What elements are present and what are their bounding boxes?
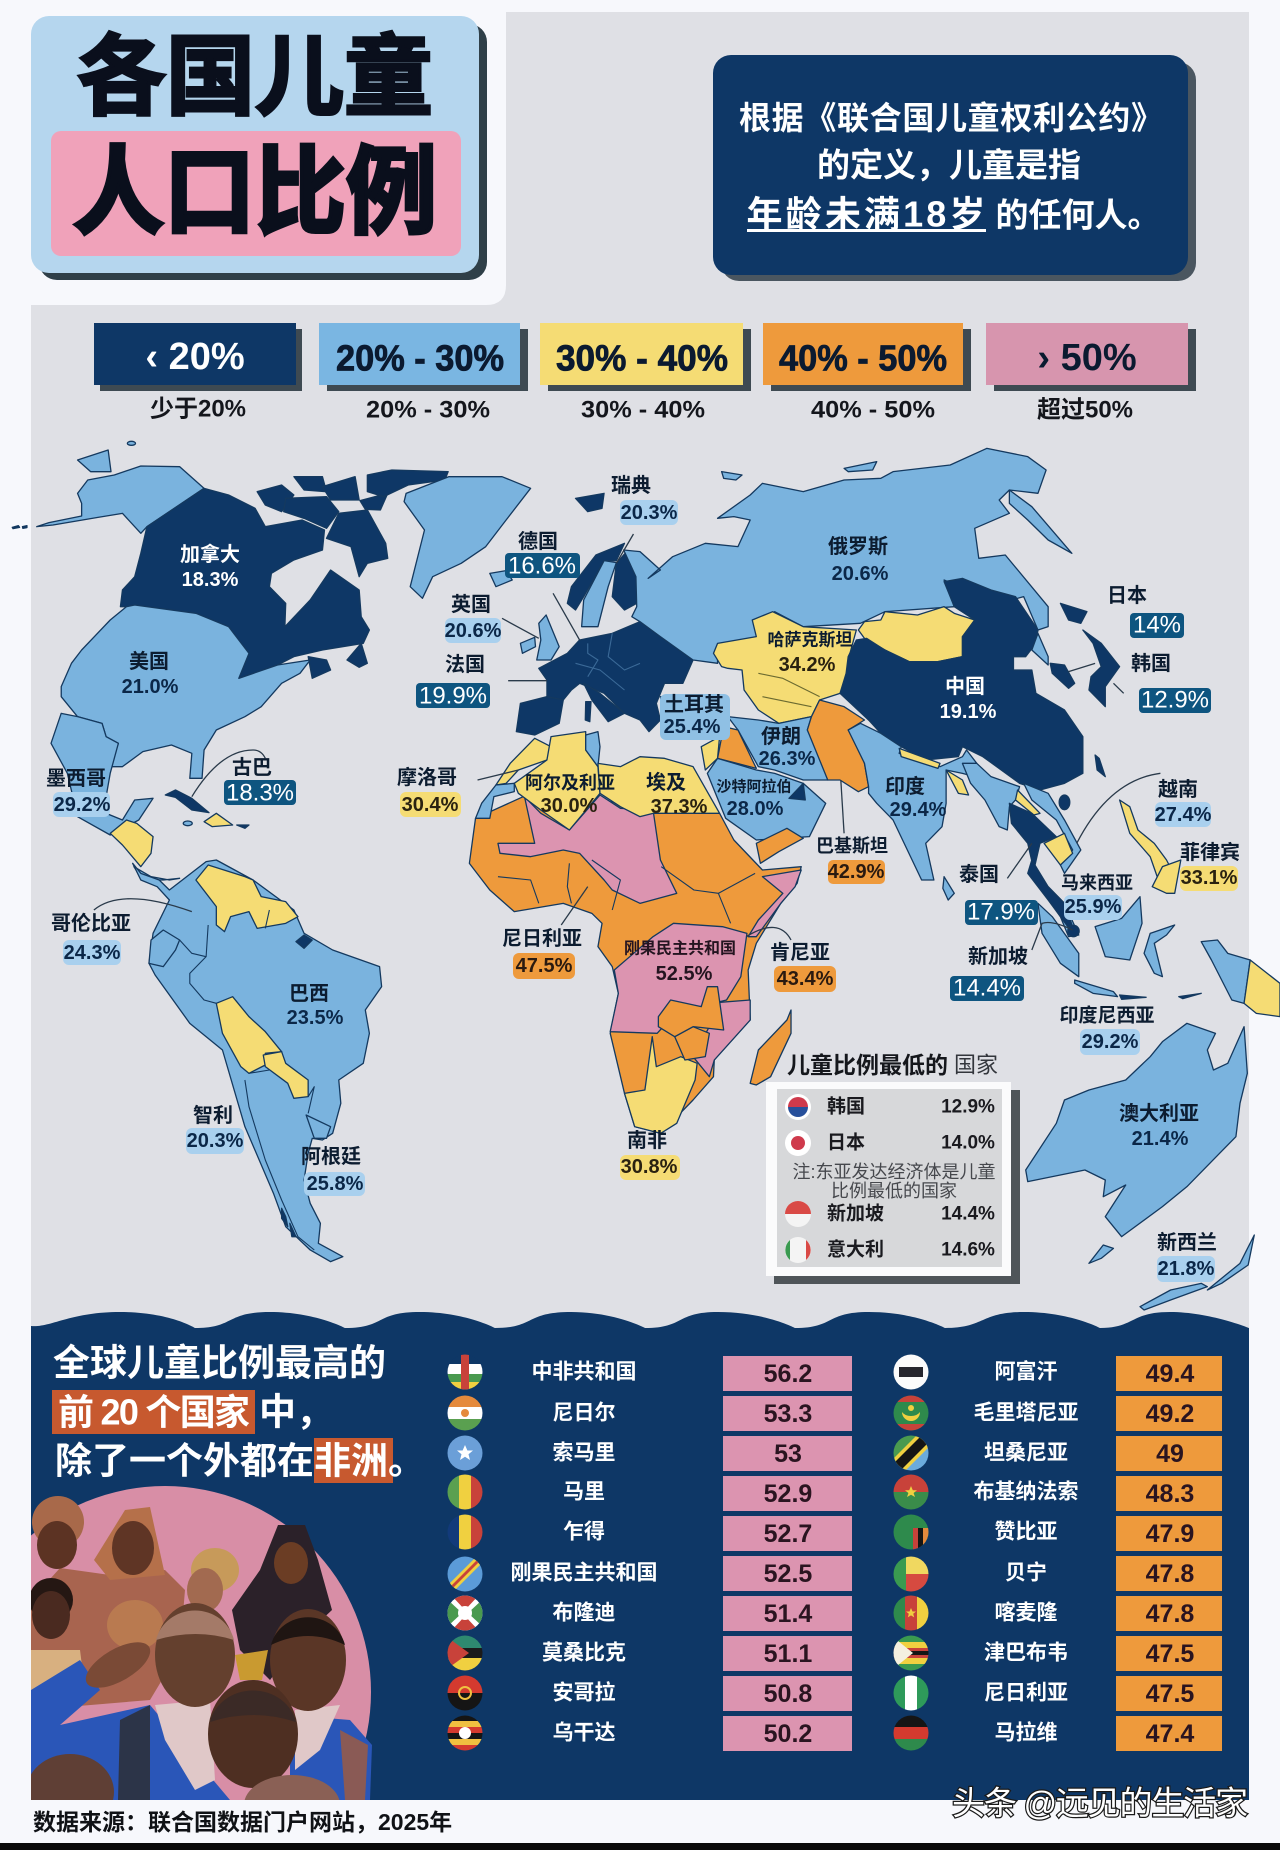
row: Tanzania: 坦桑尼亚 [984,1442,1068,1464]
label: DR Congo [624,938,736,985]
row: Chad: 52.7 [764,1520,812,1548]
label: Australia [1119,1102,1199,1150]
label: Pakistan: 巴基斯坦 [816,835,888,856]
row: Zambia: 47.9 [1146,1520,1194,1548]
label: Argentina [301,1145,365,1196]
map: africa [469,732,801,1133]
row: Cameroon: 47.8 [1146,1600,1194,1628]
blue uniforms [31,1633,372,1800]
source note: 数据来源：联合国数据门户网站，2025年 [33,1809,452,1835]
row: Mali: 马里 [563,1480,605,1504]
row: Angola: 安哥拉 [552,1680,616,1704]
row: Zambia [893,1514,1222,1551]
row: Somalia: 53 [774,1440,802,1468]
row: Uganda: 50.2 [764,1720,812,1748]
title card [31,16,487,280]
background girls [29,1496,239,1710]
row: Japan: 14.0% [941,1132,995,1154]
row: Nigeria: 47.5 [1146,1680,1194,1708]
label: Germany: 16.6% [508,552,576,580]
label: Nigeria: 尼日利亚 [502,927,582,950]
label: Kazakhstan: 34.2% [779,654,836,676]
label: UK: 20.6% [445,620,502,642]
map panel background [31,12,1249,1340]
label: Mexico: 29.2% [54,794,111,816]
row: Somalia: 索马里 [552,1442,616,1464]
title notch [0,0,506,305]
label: Egypt: 37.3% [651,796,708,818]
label: Germany: 德国 [518,530,558,553]
highlight: Africa [314,1438,393,1483]
row: South Korea: 韩国 [827,1094,865,1118]
row: Benin [893,1556,1222,1592]
definition box: 的定义，儿童是指 [817,146,1081,184]
label: Malaysia [1061,873,1133,920]
label: Malaysia: 25.9% [1065,896,1122,918]
row: Angola: 50.8 [764,1680,812,1708]
row: Zimbabwe: 津巴布韦 [984,1642,1068,1664]
row: DR Congo: 刚果民主共和国 [510,1562,658,1584]
label: Nigeria: 47.5% [516,955,573,977]
row: Uganda [447,1715,852,1751]
row: Tanzania: 49 [1156,1440,1184,1468]
label: South Korea: 12.9% [1141,686,1209,714]
row: Singapore: 14.4% [941,1204,995,1224]
row: Singapore: 新加坡 [827,1202,884,1224]
label: Indonesia [1059,1004,1155,1055]
label: Thailand: 17.9% [967,898,1035,926]
map: southern asia and oceania [750,860,1280,1310]
label: France: 19.9% [419,682,487,710]
row: Burundi: 51.4 [764,1600,812,1628]
ranking table left column [447,1354,852,1751]
row: South Korea [785,1094,995,1120]
label: Thailand: 泰国 [959,863,999,886]
legend: 40 to 50 percent: 40% - 50% [811,396,935,424]
label: Iran [759,725,816,770]
label: Nigeria [502,927,582,979]
label: Philippines [1180,841,1240,891]
label: India: 印度 [885,775,925,798]
legend: 20 to 30 percent [319,323,528,424]
map: south america [133,860,382,1262]
row: Cameroon: 喀麦隆 [994,1602,1058,1624]
label: Thailand [959,863,1038,926]
legend: 30 to 40 percent: 30% - 40% [556,338,728,378]
label: Russia: 20.6% [832,563,889,585]
definition box: 根据《联合国儿童权利公约》 [739,100,1163,136]
lowest share card [766,1052,1020,1284]
label: Iran: 26.3% [759,748,816,770]
card heading: 国家 [954,1052,998,1078]
label: Iran: 伊朗 [761,725,801,748]
note: 比例最低的国家 [831,1181,957,1201]
label: Chile: 智利 [193,1104,233,1127]
row: Afghanistan: 49.4 [1146,1360,1194,1388]
row: Malawi: 马拉维 [994,1720,1058,1744]
row: DR Congo: 52.5 [764,1560,812,1588]
row: Malawi [893,1715,1222,1751]
definition box: 的任何人。 [996,196,1160,234]
legend: 40 to 50 percent: 40% - 50% [779,338,947,378]
label: India [885,775,947,821]
label: Morocco [397,766,461,817]
row: Italy [785,1237,995,1263]
label: South Africa: 南非 [627,1129,667,1152]
label: Vietnam [1155,778,1212,827]
leader lines [94,534,1160,950]
girl in hijab [232,1525,332,1680]
label: Germany [505,530,580,580]
row: Italy: 意大利 [827,1238,884,1260]
label: Saudi Arabia: 28.0% [727,798,784,820]
watermark: 头条 @远见的生活家 [952,1784,1248,1822]
label: New Zealand [1157,1231,1217,1282]
label: Japan [1107,584,1184,638]
label: Saudi Arabia [716,778,792,820]
row: Japan [785,1130,995,1156]
label: Argentina: 25.8% [307,1173,364,1195]
bottom heading: 前 20 个国家 [58,1392,250,1432]
label: Chile: 20.3% [187,1130,244,1152]
legend: over 50 percent: › 50% [1037,337,1137,379]
label: DR Congo: 52.5% [656,963,713,985]
map: east europe, asia [624,448,1177,880]
title line two: 人口比例 [73,140,437,246]
label: Chile [186,1104,244,1154]
label: Colombia: 哥伦比亚 [51,912,131,935]
row: Benin: 47.8 [1146,1560,1194,1588]
row: Central African Republic [447,1354,852,1391]
label: Singapore: 14.4% [953,974,1021,1002]
label: Cuba [224,756,296,806]
label: Algeria [525,773,615,817]
label: Cuba: 古巴 [232,756,272,779]
row: Mozambique: 莫桑比克 [542,1642,626,1664]
row: Chad: 乍得 [563,1520,605,1544]
label: Australia: 21.4% [1132,1128,1189,1150]
label: Vietnam: 越南 [1158,778,1198,801]
row: Afghanistan [893,1354,1222,1391]
label: Japan: 14% [1133,612,1181,638]
label: Indonesia: 印度尼西亚 [1059,1004,1155,1026]
label: Saudi Arabia: 沙特阿拉伯 [716,778,792,796]
row: Mauritania [893,1395,1222,1431]
row: Mauritania: 毛里塔尼亚 [974,1402,1078,1424]
label: Brazil [287,983,344,1029]
label: South Korea [1131,652,1211,714]
row: Angola [447,1675,852,1711]
row: Zambia: 赞比亚 [994,1520,1058,1544]
row: Niger: 53.3 [764,1400,812,1428]
label: Canada: 18.3% [182,569,239,591]
label: Kazakhstan [768,630,852,676]
row: Uganda: 乌干达 [552,1722,616,1744]
label: USA: 21.0% [122,676,179,698]
label: Sweden: 瑞典 [611,474,651,497]
label: Sweden: 20.3% [621,502,678,524]
row: Mali [447,1474,852,1511]
label: Egypt: 埃及 [646,771,686,794]
label: Singapore: 新加坡 [968,945,1028,968]
label: Sweden [611,474,678,525]
row: Zimbabwe [893,1635,1222,1671]
row: Niger: 尼日尔 [552,1402,616,1424]
label: Philippines: 33.1% [1181,867,1238,889]
row: Mozambique [447,1635,852,1671]
row: Japan: 日本 [827,1132,865,1154]
row: Central African Republic: 56.2 [764,1360,812,1388]
legend: over 50 percent: 超过50% [1037,396,1133,424]
label: Colombia: 24.3% [64,942,121,964]
row: Burundi: 布隆迪 [552,1602,616,1624]
row: Mozambique: 51.1 [764,1640,812,1668]
label: Turkey: 土耳其 [664,693,724,716]
world map [12,441,1280,1310]
row: Burkina Faso: 布基纳法索 [974,1480,1078,1504]
label: Mexico [46,767,111,817]
bottom black bar [0,1843,1280,1850]
label: South Africa: 30.8% [621,1156,678,1178]
label: Turkey: 25.4% [664,716,721,738]
label: Egypt [646,771,708,818]
row: DR Congo [447,1556,852,1592]
bottom heading: 除了一个外都在非洲。 [55,1440,425,1482]
label: Algeria: 阿尔及利亚 [525,773,615,793]
row: Central African Republic: 中非共和国 [532,1360,636,1384]
label: Vietnam: 27.4% [1155,804,1212,826]
label: France [416,653,490,710]
row: Burundi [447,1595,852,1631]
legend: under 20 percent [94,323,302,422]
ranking table right column [893,1354,1222,1751]
label: Brazil: 23.5% [287,1007,344,1029]
label: Morocco: 30.4% [402,794,459,816]
label: Turkey [660,693,730,740]
legend: 20 to 30 percent: 20% - 30% [366,396,490,424]
label: Canada [180,542,240,591]
legend: 30 to 40 percent [540,323,751,424]
row: Burkina Faso: 48.3 [1146,1480,1194,1508]
row: Afghanistan: 阿富汗 [994,1360,1058,1384]
row: Burkina Faso [893,1474,1222,1511]
row: Chad [447,1514,852,1551]
label: Canada: 加拿大 [180,542,240,566]
label: Singapore [950,945,1028,1002]
label: China: 19.1% [940,701,997,723]
definition box: 年龄未满18岁 [746,194,986,234]
legend: under 20 percent: ‹ 20% [145,336,245,378]
row: Somalia [447,1435,852,1471]
label: Cuba: 18.3% [226,780,294,806]
row: Zimbabwe: 47.5 [1146,1640,1194,1668]
children illustration [31,1486,372,1800]
label: Argentina: 阿根廷 [301,1145,361,1168]
title line one: 各国儿童 [77,28,433,126]
label: Colombia [51,912,131,965]
row: Tanzania [893,1435,1222,1471]
label: UK [445,593,502,643]
legend: 20 to 30 percent: 20% - 30% [336,338,504,378]
card heading: 儿童比例最低的 [787,1052,948,1078]
label: Morocco: 摩洛哥 [397,766,457,789]
row: Mauritania: 49.2 [1146,1400,1194,1428]
bottom heading: 中， [259,1392,333,1432]
label: Algeria: 30.0% [541,795,598,817]
row: Singapore [785,1201,995,1227]
highlight: top 20 [52,1390,255,1434]
bottom panel [31,1312,1249,1800]
definition box [713,55,1196,281]
row: South Korea: 12.9% [941,1096,995,1118]
label: South Africa [620,1129,680,1180]
note [792,1162,996,1201]
bottom heading [52,1342,425,1483]
legend: under 20 percent: 少于20% [150,396,246,422]
label: Philippines: 菲律宾 [1180,841,1240,864]
label: Kenya: 肯尼亚 [770,941,830,964]
row: Niger [447,1395,852,1431]
label: Pakistan: 42.9% [828,861,885,883]
label: USA [122,650,179,698]
label: Japan: 日本 [1107,584,1147,607]
bottom heading: 全球儿童比例最高的 [53,1342,386,1384]
legend: 30 to 40 percent: 30% - 40% [581,396,705,424]
label: Pakistan [816,835,888,884]
row: Mali: 52.9 [764,1480,812,1508]
legend: over 50 percent [986,323,1196,424]
row: Cameroon [893,1595,1222,1631]
row: Malawi: 47.4 [1146,1720,1194,1748]
label: Malaysia: 马来西亚 [1061,873,1133,893]
label: DR Congo: 刚果民主共和国 [624,938,736,958]
legend: 40 to 50 percent [763,323,971,424]
label: Brazil: 巴西 [289,983,329,1005]
label: New Zealand: 新西兰 [1157,1231,1217,1254]
note: 注:东亚发达经济体是儿童 [792,1162,996,1182]
map: north america and europe west [12,441,693,880]
label: Mexico: 墨西哥 [46,767,106,790]
boys faces [31,1603,346,1800]
label: UK: 英国 [451,593,491,616]
label: Kenya [770,941,836,992]
row: Nigeria [893,1675,1222,1711]
label: Indonesia: 29.2% [1082,1031,1139,1053]
label: South Korea: 韩国 [1131,652,1171,675]
label: France: 法国 [445,653,485,676]
row: Nigeria: 尼日利亚 [984,1682,1068,1704]
label: USA: 美国 [129,650,169,673]
row: Benin: 贝宁 [1005,1560,1047,1584]
label: Kazakhstan: 哈萨克斯坦 [768,630,852,650]
row: Italy: 14.6% [941,1240,995,1260]
label: China: 中国 [945,675,985,698]
label: New Zealand: 21.8% [1158,1258,1215,1280]
label: China [940,675,997,723]
label: Kenya: 43.4% [777,968,834,990]
label: Australia: 澳大利亚 [1119,1102,1199,1125]
label: India: 29.4% [890,799,947,821]
label: Russia [828,535,889,585]
label: Russia: 俄罗斯 [828,535,888,558]
